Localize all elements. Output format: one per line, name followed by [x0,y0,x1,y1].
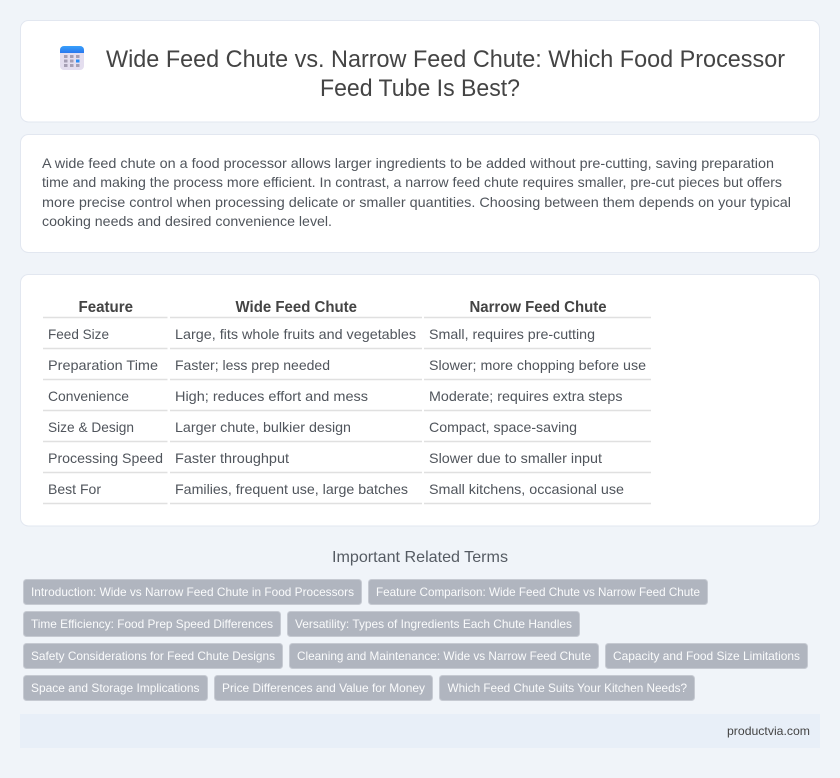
panel: introduction text [20,134,820,252]
row: size and design: Size & Design [48,419,134,435]
chip: Space and Storage Implications [31,681,200,695]
row: preparation time: Slower; more chopping before use [429,357,646,373]
row: best for: Small kitchens, occasional use [429,481,624,497]
chip [24,676,208,700]
icon: calendar grid [60,46,84,70]
table header: Feature [78,299,133,316]
row: best for: Best For [48,481,101,497]
related term chips [24,580,808,700]
chip [214,676,432,700]
panel: introduction text: time and making the process more efficient. In contrast, a narrow feed chute requires smaller, pre-cut pieces but offers [42,174,782,190]
chip: Introduction: Wide vs Narrow Feed Chute in Food Processors [31,585,354,599]
row: size and design [48,419,577,435]
chip [24,580,362,604]
row: best for: Families, frequent use, large batches [175,481,408,497]
row: convenience [48,388,622,404]
chip: Feature Comparison: Wide Feed Chute vs Narrow Feed Chute [376,585,700,599]
panel: comparison table [20,274,820,526]
row: feed size: Large, fits whole fruits and vegetables [175,326,416,342]
panel: introduction text: A wide feed chute on a food processor allows larger ingredients to be added without pre-cutting, saving preparation [42,155,774,171]
panel: introduction text: cooking needs and desired convenience level. [42,213,332,229]
chip [440,676,694,700]
chip [24,612,280,636]
row: preparation time: Faster; less prep needed [175,357,330,373]
chip [368,580,708,604]
table header: Narrow Feed Chute [470,299,607,316]
row: processing speed [48,450,602,466]
chip: Versatility: Types of Ingredients Each Chute Handles [295,617,572,631]
footer bar [20,714,820,748]
row: convenience: Convenience [48,388,129,404]
chip: Price Differences and Value for Money [222,681,425,695]
row: processing speed: Slower due to smaller input [429,450,602,466]
chip: Which Feed Chute Suits Your Kitchen Needs? [448,681,687,695]
row: size and design: Compact, space-saving [429,419,577,435]
table header [78,299,607,316]
row: convenience: High; reduces effort and mess [175,388,368,404]
title text: Feed Tube Is Best? [320,75,520,102]
row: processing speed: Processing Speed [48,450,163,466]
row: processing speed: Faster throughput [175,450,289,466]
row: preparation time [48,357,646,373]
row: size and design: Larger chute, bulkier design [175,419,351,435]
heading: important related terms: Important Related Terms [332,549,508,566]
row: best for [48,481,624,497]
panel: title [20,20,820,122]
chip [290,644,598,668]
row: feed size: Feed Size [48,326,109,342]
chip: Capacity and Food Size Limitations [613,649,800,663]
panel: introduction text: more precise control when processing delicate or smaller quantities. Choosing between them depends on your typical [42,194,791,210]
row: feed size: Small, requires pre-cutting [429,326,595,342]
chip: Safety Considerations for Feed Chute Designs [31,649,275,663]
chip [606,644,808,668]
title text: Wide Feed Chute vs. Narrow Feed Chute: Which Food Processor [106,46,785,73]
chip [24,644,282,668]
row: preparation time: Preparation Time [48,357,158,373]
footer bar: productvia.com [727,724,810,738]
chip: Time Efficiency: Food Prep Speed Differences [31,617,273,631]
chip [288,612,580,636]
row: convenience: Moderate; requires extra steps [429,388,622,404]
row: feed size [48,326,595,342]
chip: Cleaning and Maintenance: Wide vs Narrow Feed Chute [297,649,591,663]
title text [106,46,785,102]
table header: Wide Feed Chute [236,299,357,316]
